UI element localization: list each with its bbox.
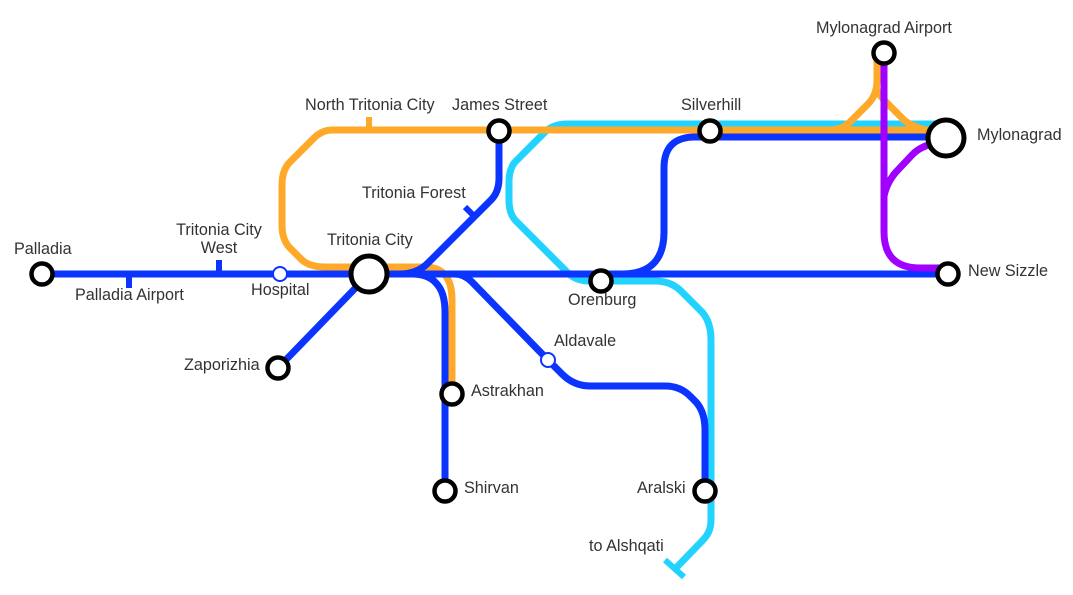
station: Tritonia Forest: Tritonia Forest <box>362 184 466 202</box>
station: Mylonagrad Airport <box>816 19 952 64</box>
station: Silverhill <box>681 96 741 142</box>
station: Astrakhan: Astrakhan <box>471 382 544 400</box>
line: cyan <box>509 124 946 577</box>
station: Orenburg: Orenburg <box>568 291 636 309</box>
station: Shirvan <box>434 479 519 502</box>
station: Aldavale: Aldavale <box>554 332 616 350</box>
station: Hospital <box>251 267 309 299</box>
station: Zaporizhia <box>184 356 288 378</box>
station: Orenburg <box>568 270 636 309</box>
station: Mylonagrad: Mylonagrad <box>977 126 1062 144</box>
station: James Street: James Street <box>452 96 548 114</box>
station: Aldavale <box>541 332 616 367</box>
station: Tritonia City <box>327 231 414 292</box>
label: to Alshqati: to Alshqati <box>589 537 664 555</box>
station: North Tritonia City: North Tritonia City <box>305 96 435 114</box>
station: Mylonagrad <box>928 120 1062 156</box>
station: Aralski <box>637 479 716 502</box>
station: Hospital: Hospital <box>251 281 309 299</box>
station: Aralski: Aralski <box>637 479 686 497</box>
station: Palladia Airport: Palladia Airport <box>75 286 184 304</box>
station: Shirvan: Shirvan <box>464 479 519 497</box>
station: New Sizzle: New Sizzle <box>968 262 1048 280</box>
station: Tritonia City: Tritonia City <box>327 231 414 249</box>
line: purple <box>884 53 948 268</box>
station: New Sizzle <box>938 262 1048 284</box>
station: Astrakhan <box>442 382 544 404</box>
station: Tritonia City West: Tritonia City <box>176 221 262 239</box>
station: James Street <box>452 96 548 142</box>
station: Palladia <box>14 240 72 284</box>
station: Palladia: Palladia <box>14 240 72 258</box>
line: orange <box>282 53 935 394</box>
station: Silverhill: Silverhill <box>681 96 741 114</box>
line: blue <box>42 131 948 491</box>
station: Tritonia City West: West <box>201 239 238 257</box>
station: Mylonagrad Airport: Mylonagrad Airport <box>816 19 952 37</box>
station: Zaporizhia: Zaporizhia <box>184 356 260 374</box>
